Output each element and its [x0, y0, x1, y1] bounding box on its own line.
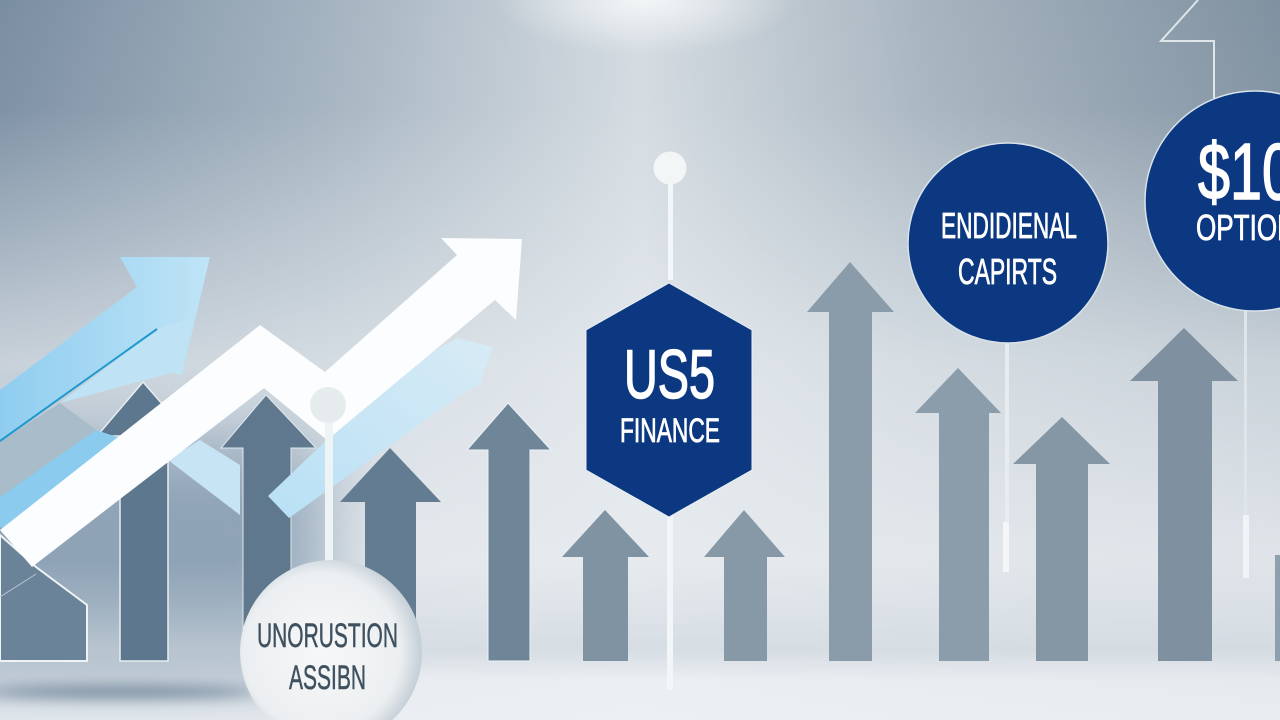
- arrow 11 right edge: [1275, 555, 1280, 661]
- hexagon: US5 finance: [586, 283, 752, 517]
- circle: endidienal capirts: [908, 143, 1108, 343]
- arrow 3: [340, 448, 441, 620]
- white zigzag growth arrow: [0, 238, 522, 567]
- light blue arrow upper left: [0, 257, 210, 497]
- sphere: unorustion assign: [240, 560, 422, 720]
- arrow 6: [704, 510, 785, 661]
- sphere: unorustion assign: UNORUSTION: [257, 617, 398, 655]
- house outline arrow at far left: [0, 535, 87, 661]
- top small pin: [654, 152, 686, 280]
- circle: $10 option: [1145, 91, 1280, 311]
- light blue lower band: [0, 430, 120, 530]
- arrow 9: [1013, 417, 1110, 661]
- arrow 2: [221, 395, 316, 640]
- arrow 8: [915, 368, 1001, 661]
- arrow 1: [97, 382, 190, 661]
- circle: endidienal capirts: ENDIDIENAL: [941, 205, 1077, 246]
- circle: endidienal capirts: CAPIRTS: [958, 251, 1057, 292]
- arrow 10: [1130, 328, 1238, 661]
- light blue chevron behind white arrow: [168, 440, 240, 515]
- small translucent pin on sphere: [310, 387, 346, 562]
- hexagon: US5 finance: US5: [624, 336, 715, 413]
- light blue arrow right: [268, 338, 493, 518]
- grey upward arrows: [97, 262, 1280, 661]
- arrow 4: [467, 403, 551, 661]
- sphere: unorustion assign: ASSIBN: [289, 659, 366, 697]
- lower stem of hexagon: [667, 515, 673, 690]
- stem under endidienal circle: [1003, 340, 1009, 572]
- stem under $10 circle: [1243, 305, 1249, 578]
- top right outline arrow: [1161, 0, 1214, 98]
- hexagon: US5 finance: FINANCE: [620, 412, 720, 450]
- arrow 7: [807, 262, 894, 661]
- arrow 5: [562, 510, 649, 661]
